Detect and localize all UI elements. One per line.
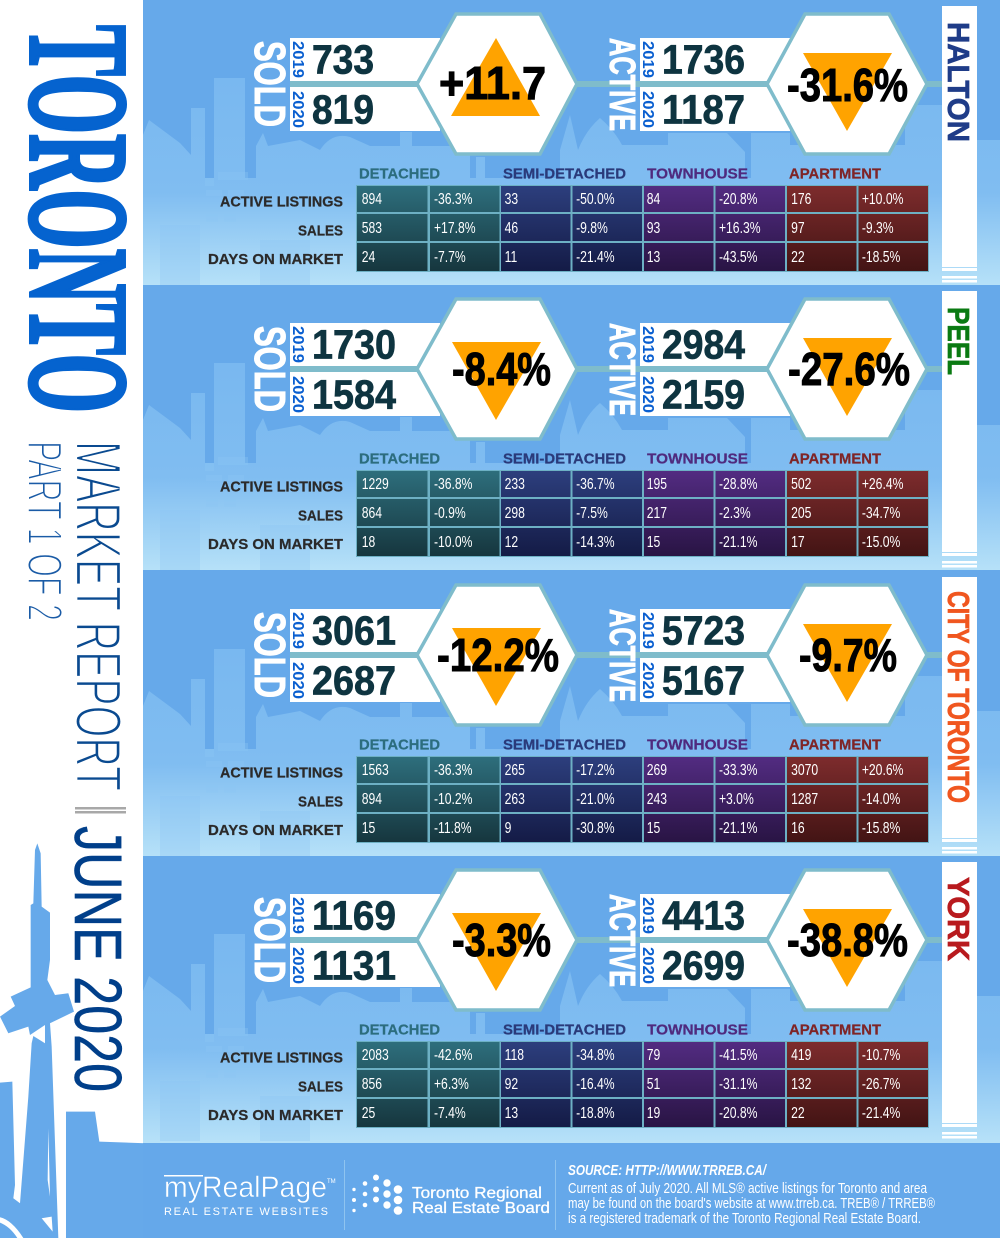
data table: 233: [505, 475, 525, 494]
data table: [356, 470, 929, 557]
data table: -0.9%: [434, 504, 466, 523]
data table: -7.5%: [576, 504, 608, 523]
row labels: ACTIVE LISTINGS: [220, 1050, 343, 1066]
data table: 92: [505, 1075, 518, 1094]
triangle: active change down: [803, 53, 892, 131]
active years: 2019: [639, 326, 656, 363]
sold years: [289, 326, 306, 413]
data table: -7.7%: [434, 248, 466, 267]
data table: -15.0%: [862, 533, 901, 552]
logo: myRealPage: TM: [327, 1179, 336, 1185]
active change: -9.7%: [799, 629, 897, 681]
active years: 2020: [639, 376, 656, 413]
data table: 13: [647, 248, 660, 267]
row labels: ACTIVE LISTINGS: [220, 478, 343, 496]
active change: -38.8%: [787, 914, 908, 966]
data table: [356, 185, 929, 272]
sold label: SOLD: [245, 326, 294, 412]
data table: [356, 756, 929, 843]
row labels: SALES: [298, 1078, 343, 1096]
data table: +20.6%: [862, 761, 904, 780]
data table: 97: [791, 219, 805, 238]
york label: YORK: [941, 877, 976, 962]
source note: [568, 1162, 935, 1227]
sold years: [289, 897, 306, 984]
row labels: ACTIVE LISTINGS: [220, 194, 343, 210]
row labels: [208, 1050, 343, 1124]
active numbers: 2699: [662, 942, 745, 988]
data table: [356, 1041, 929, 1128]
sold change: -8.4%: [452, 343, 551, 395]
sold numbers: [312, 892, 396, 988]
data table: 217: [647, 504, 667, 523]
active numbers: 5723: [662, 608, 745, 654]
data table: -10.0%: [434, 533, 473, 552]
data table: 22: [791, 1104, 805, 1123]
data table: -30.8%: [576, 819, 615, 838]
source note: SOURCE: HTTP://WWW.TRREB.CA/: [568, 1162, 767, 1179]
active change: -31.6%: [787, 59, 908, 111]
data table: 419: [791, 1046, 812, 1065]
data table: 856: [362, 1075, 382, 1094]
data table: 243: [647, 790, 667, 809]
active numbers: [662, 892, 745, 988]
active years: 2019: [639, 612, 656, 649]
triangle: sold change down: [452, 628, 541, 706]
data table: -18.8%: [576, 1104, 615, 1123]
data table: -34.7%: [862, 504, 901, 523]
column headers: TOWNHOUSE: [647, 1022, 748, 1038]
data table: -42.6%: [434, 1046, 473, 1065]
active numbers: [662, 36, 745, 132]
active years: 2020: [639, 91, 656, 128]
row labels: SALES: [298, 222, 343, 240]
sold label: SOLD: [245, 41, 294, 127]
sold numbers: 1730: [312, 322, 396, 368]
data table: 583: [362, 219, 382, 238]
active years: [639, 41, 656, 128]
data table: -18.5%: [862, 248, 901, 267]
footer divider right: [555, 1160, 556, 1230]
text: Toronto Regional Real Estate Board: Toronto Regional: [412, 1185, 542, 1202]
active years: [639, 612, 656, 699]
row labels: ACTIVE LISTINGS: [220, 764, 343, 782]
active years: 2019: [639, 41, 656, 78]
data table: -36.7%: [576, 475, 615, 494]
data table: -36.3%: [434, 190, 473, 209]
data table: 16: [791, 819, 805, 838]
column headers: [359, 166, 881, 182]
source note: Current as of July 2020. All MLS® active listings for Toronto and area: [568, 1181, 928, 1197]
data table: +3.0%: [719, 790, 754, 809]
row labels: [208, 764, 343, 839]
column headers: [359, 450, 881, 468]
data table: 24: [362, 248, 375, 267]
active numbers: [662, 322, 745, 418]
row labels: DAYS ON MARKET: [208, 1107, 343, 1124]
column headers: TOWNHOUSE: [647, 450, 748, 468]
column headers: DETACHED: [359, 166, 440, 182]
data table: 894: [362, 190, 382, 209]
data table: -17.2%: [576, 761, 615, 780]
data table: 9: [505, 819, 511, 838]
triangle: active change down: [803, 338, 892, 416]
data table: -11.8%: [434, 819, 472, 838]
data table: 2083: [362, 1046, 389, 1065]
data table: -14.3%: [576, 533, 615, 552]
data table: 205: [791, 504, 812, 523]
active change: -27.6%: [788, 343, 910, 395]
column headers: APARTMENT: [789, 1022, 881, 1038]
data table: 93: [647, 219, 660, 238]
data table: 298: [505, 504, 525, 523]
column headers: SEMI-DETACHED: [503, 1022, 626, 1038]
data table: 263: [505, 790, 525, 809]
row labels: [208, 194, 343, 268]
active label: ACTIVE: [602, 609, 643, 702]
data table: -20.8%: [719, 190, 758, 209]
sold numbers: 1131: [312, 942, 396, 988]
data table: -34.8%: [576, 1046, 615, 1065]
data table: 18: [362, 533, 375, 552]
sold years: [289, 41, 306, 128]
data table: -28.8%: [719, 475, 758, 494]
column headers: APARTMENT: [789, 736, 881, 754]
source note: is a registered trademark of the Toronto Regional Real Estate Board.: [568, 1211, 921, 1227]
active label: ACTIVE: [602, 323, 643, 416]
subtitle: Part 1 of 2: PART 1 OF 2: [17, 441, 71, 621]
data table: 79: [647, 1046, 660, 1065]
panel: City of Toronto: [143, 571, 1000, 856]
data table: 84: [647, 190, 660, 209]
sold change: +11.7: [439, 57, 546, 109]
panel: York: [143, 856, 1000, 1143]
data table: 269: [647, 761, 667, 780]
data table: 3070: [791, 761, 818, 780]
sold numbers: 733: [312, 36, 374, 82]
data table: 11: [505, 248, 517, 267]
sold years: 2019: [289, 897, 306, 934]
data table: -36.3%: [434, 761, 473, 780]
logo: myRealPage: REAL ESTATE WEBSITES: [164, 1206, 328, 1218]
active years: 2020: [639, 947, 656, 984]
logo: myRealPage: myRealPage: [164, 1171, 327, 1204]
data table: 176: [791, 190, 812, 209]
sold numbers: 2687: [312, 658, 396, 704]
data table: -15.8%: [862, 819, 901, 838]
row labels: DAYS ON MARKET: [208, 251, 343, 268]
data table: -9.3%: [862, 219, 894, 238]
data table: 15: [647, 819, 660, 838]
data table: 1563: [362, 761, 389, 780]
data table: 17: [791, 533, 805, 552]
sold label: SOLD: [245, 612, 294, 698]
active numbers: 4413: [662, 892, 745, 938]
row labels: DAYS ON MARKET: [208, 536, 343, 553]
data table: 19: [647, 1104, 660, 1123]
data table: 118: [505, 1046, 524, 1065]
peel label: PEEL: [941, 307, 976, 375]
active numbers: 1187: [662, 86, 745, 132]
data table: -7.4%: [434, 1104, 466, 1123]
triangle: sold change down: [452, 913, 541, 991]
data table: -14.0%: [862, 790, 901, 809]
sold years: 2020: [289, 662, 306, 699]
active numbers: 2159: [662, 372, 745, 418]
data table: -21.1%: [719, 819, 758, 838]
data table: 195: [647, 475, 667, 494]
column headers: SEMI-DETACHED: [503, 736, 626, 754]
text: Toronto Regional Real Estate Board: [412, 1185, 550, 1217]
data table: 1287: [791, 790, 818, 809]
data table: 1229: [362, 475, 389, 494]
sold numbers: 3061: [312, 608, 396, 654]
column headers: SEMI-DETACHED: [503, 166, 626, 182]
data table: 132: [791, 1075, 812, 1094]
active numbers: 1736: [662, 36, 745, 82]
triangle: sold change up: [451, 38, 540, 116]
triangle: active change down: [803, 909, 892, 987]
triangle: active change down: [803, 624, 892, 702]
data table: +6.3%: [434, 1075, 469, 1094]
divider bars: [75, 807, 126, 814]
data table: -2.3%: [719, 504, 751, 523]
data table: 51: [647, 1075, 660, 1094]
data table: 265: [505, 761, 525, 780]
active label: ACTIVE: [602, 38, 643, 131]
data table: 33: [505, 190, 518, 209]
active years: 2020: [639, 662, 656, 699]
sold numbers: 819: [312, 86, 374, 132]
data table: -43.5%: [719, 248, 758, 267]
CN Tower and skyline silhouette: [0, 843, 145, 1238]
sold years: 2020: [289, 376, 306, 413]
active numbers: [662, 608, 745, 704]
halton label: HALTON: [941, 22, 976, 142]
data table: +16.3%: [719, 219, 761, 238]
data table: 15: [647, 533, 660, 552]
sold years: 2019: [289, 612, 306, 649]
sold change: -12.2%: [437, 629, 559, 681]
data table: 13: [505, 1104, 518, 1123]
column headers: DETACHED: [359, 1022, 440, 1038]
data table: +10.0%: [862, 190, 904, 209]
data table: 502: [791, 475, 812, 494]
subtitle: Market Report: MARKET REPORT: [62, 441, 135, 791]
active numbers: 5167: [662, 658, 745, 704]
active numbers: 2984: [662, 322, 745, 368]
data table: -20.8%: [719, 1104, 758, 1123]
city of toronto label: CITY OF TORONTO: [941, 591, 976, 803]
sold years: 2020: [289, 91, 306, 128]
sold years: [289, 612, 306, 699]
sold years: 2019: [289, 41, 306, 78]
panel: Halton: [143, 0, 1000, 285]
data table: 15: [362, 819, 375, 838]
data table: -10.2%: [434, 790, 473, 809]
column headers: APARTMENT: [789, 166, 881, 182]
data table: 894: [362, 790, 382, 809]
column headers: DETACHED: [359, 450, 440, 468]
data table: -9.8%: [576, 219, 608, 238]
column headers: DETACHED: [359, 736, 440, 754]
data table: -26.7%: [862, 1075, 901, 1094]
data table: -21.1%: [719, 533, 758, 552]
sold numbers: [312, 608, 396, 704]
triangle: sold change down: [452, 342, 541, 420]
title: Toronto: TORONTO: [0, 25, 158, 413]
sold years: 2019: [289, 326, 306, 363]
column headers: APARTMENT: [789, 450, 881, 468]
data table: -41.5%: [719, 1046, 758, 1065]
sold numbers: [312, 322, 396, 418]
active years: [639, 897, 656, 984]
sold label: SOLD: [245, 897, 294, 983]
column headers: TOWNHOUSE: [647, 166, 748, 182]
active years: [639, 326, 656, 413]
data table: -36.8%: [434, 475, 473, 494]
sold change: -3.3%: [452, 914, 551, 966]
date: June 2020: JUNE 2020: [60, 826, 135, 1092]
data table: 25: [362, 1104, 375, 1123]
data table: -10.7%: [862, 1046, 901, 1065]
sold numbers: [312, 36, 374, 132]
data table: 22: [791, 248, 805, 267]
active label: ACTIVE: [602, 894, 643, 987]
data table: -21.0%: [576, 790, 615, 809]
column headers: TOWNHOUSE: [647, 736, 748, 754]
data table: -21.4%: [576, 248, 615, 267]
sold years: 2020: [289, 947, 306, 984]
data table: 864: [362, 504, 382, 523]
row labels: SALES: [298, 794, 343, 810]
row labels: SALES: [298, 508, 343, 524]
active years: 2019: [639, 897, 656, 934]
data table: -50.0%: [576, 190, 615, 209]
data table: -16.4%: [576, 1075, 615, 1094]
column headers: [359, 1022, 881, 1038]
sold numbers: 1169: [312, 892, 396, 938]
data table: +17.8%: [434, 219, 476, 238]
footer divider left: [344, 1160, 345, 1230]
text: Toronto Regional Real Estate Board: Real Estate Board: [412, 1200, 550, 1217]
sold numbers: 1584: [312, 372, 396, 418]
logo: TRREB dots: [352, 1174, 402, 1215]
row labels: DAYS ON MARKET: [208, 822, 343, 839]
data table: -21.4%: [862, 1104, 901, 1123]
data table: 46: [505, 219, 518, 238]
row labels: [208, 478, 343, 553]
data table: 12: [505, 533, 518, 552]
panel: Peel: [143, 285, 1000, 570]
column headers: SEMI-DETACHED: [503, 450, 626, 468]
column headers: [359, 736, 881, 754]
data table: -31.1%: [719, 1075, 758, 1094]
footer band: [143, 1143, 1000, 1238]
data table: +26.4%: [862, 475, 904, 494]
data table: -33.3%: [719, 761, 758, 780]
